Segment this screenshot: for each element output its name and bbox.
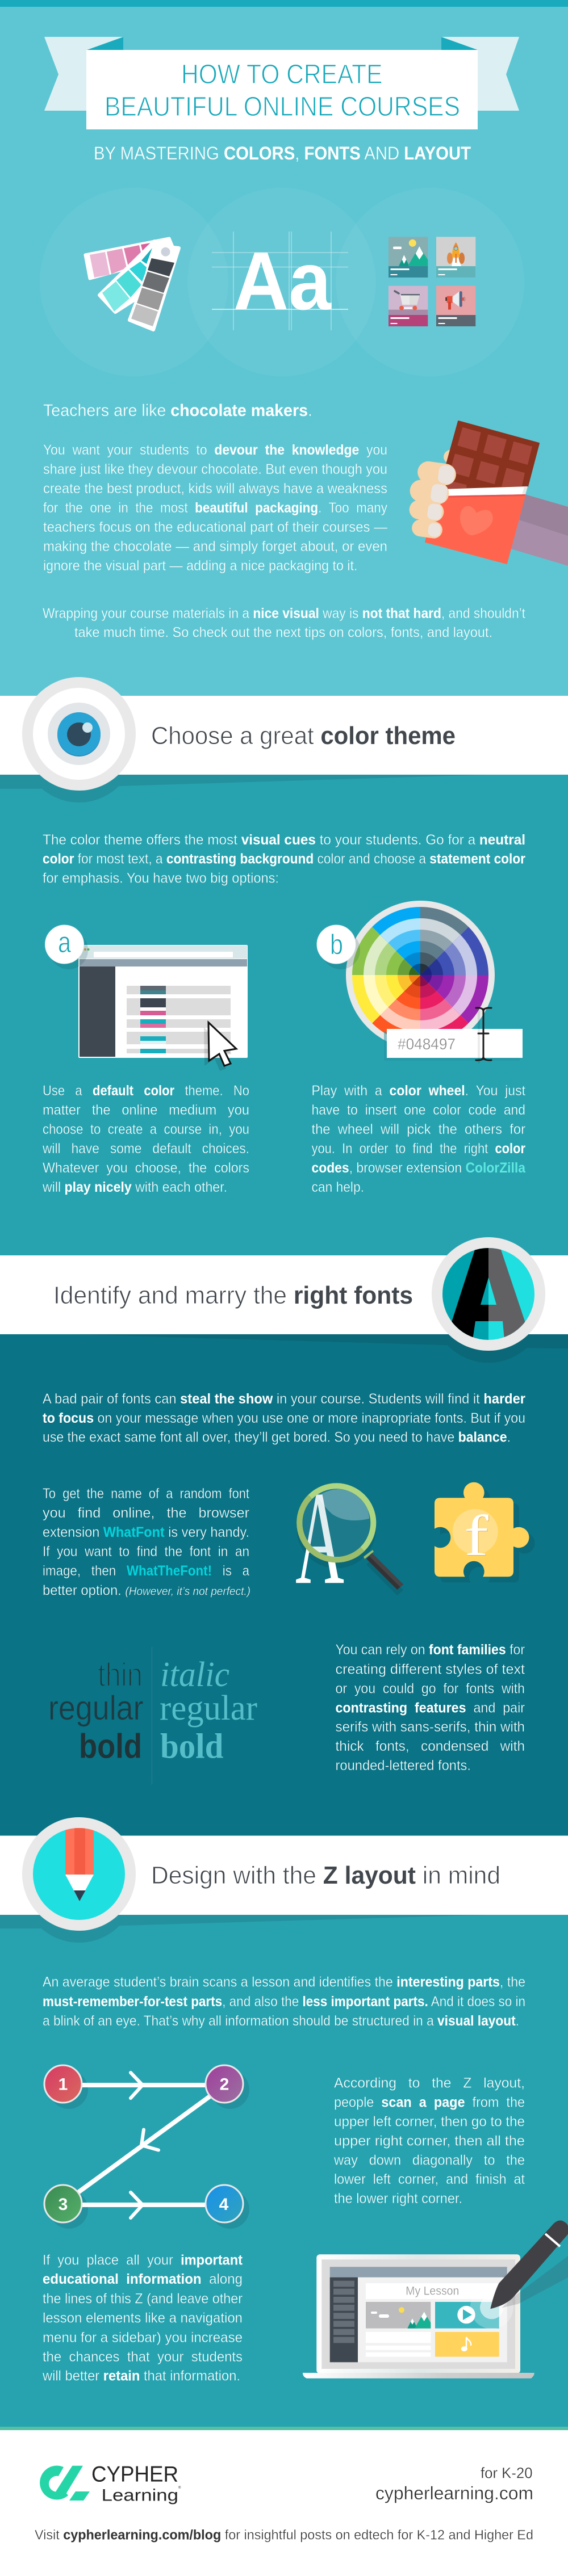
- lesson audio tile: [435, 2332, 499, 2357]
- touch ripple: [470, 2286, 513, 2329]
- option a text: matter the online medium you: [43, 1102, 249, 1118]
- font identify text: To get the name of a random font: [43, 1486, 249, 1502]
- retention text: educational information along: [43, 2271, 243, 2287]
- sample: serif: regular: [160, 1689, 257, 1728]
- Z layout explanation text: lower left corner, and finish at: [334, 2171, 525, 2187]
- card: rocket: [436, 237, 475, 278]
- intro paragraph: ignore the visual part — adding a nice packaging to it.: [43, 558, 358, 574]
- layout intro text: [43, 1974, 525, 2029]
- option a text: [42, 1083, 249, 1195]
- bubble: option a: [45, 925, 88, 969]
- sample: sans-serif: regular: [48, 1689, 143, 1727]
- illustration: laptop with lesson: [303, 2220, 568, 2379]
- diagram: Z layout: [44, 2065, 249, 2229]
- circle shadows: [49, 2070, 249, 2229]
- lesson text lines: [366, 2332, 431, 2357]
- layout intro text: An average student’s brain scans a lesson and identifies the interesting parts, the: [43, 1974, 525, 1990]
- intro paragraph: [43, 442, 387, 574]
- icon: puzzle piece with f: f: [464, 1504, 488, 1568]
- option a text: Use a default color theme. No: [43, 1083, 249, 1099]
- title: BEAUTIFUL ONLINE COURSES: [105, 92, 460, 122]
- sample: sans-serif: bold: [79, 1728, 142, 1765]
- option b text: codes, browser extension ColorZilla: [311, 1160, 526, 1176]
- font families text: [335, 1642, 525, 1774]
- background circles: [40, 188, 524, 376]
- bubble: option b: [317, 925, 360, 969]
- icon: mouse cursor: [204, 1023, 236, 1071]
- intro paragraph: share just like they devour chocolate. But even though you: [43, 461, 387, 477]
- icon: colour swatch fan: [85, 238, 179, 330]
- font families text: thick fonts, condensed with: [335, 1738, 525, 1754]
- option a text: Whatever you choose, the colors: [43, 1160, 249, 1176]
- Z layout explanation text: According to the Z layout,: [334, 2075, 525, 2091]
- color code input: [384, 1029, 523, 1061]
- chocolate: [440, 421, 539, 489]
- retention text: [42, 2252, 243, 2384]
- pen shadow: [502, 2256, 568, 2308]
- sample: serif: italic: [160, 1655, 229, 1694]
- option b illustration: color wheel: [338, 893, 523, 1062]
- intro paragraph: create the best product, kids will always have a weakness: [43, 481, 387, 497]
- layout intro text: must-remember-for-test parts, and also the less important parts. And it does so in: [43, 1994, 525, 2010]
- panel: fonts background: [0, 1334, 568, 1836]
- lesson video tile: [435, 2302, 499, 2329]
- icon: eye: [22, 677, 136, 791]
- node 3: [44, 2185, 82, 2222]
- fonts intro text: use the exact same font all over, they’ll get bored. So you need to have balance.: [43, 1429, 511, 1445]
- intro paragraph: for the one in the most beautiful packaging. Too many: [43, 500, 387, 516]
- heading: color theme: Choose a great color theme: [151, 722, 456, 750]
- logo wordmark: Learning: [102, 2486, 178, 2505]
- option b text: the wheel will pick the others for: [311, 1121, 525, 1137]
- icon: text cursor: [476, 1008, 491, 1062]
- arm: [511, 494, 568, 566]
- font identify text: you find online, the browser: [43, 1505, 249, 1521]
- heading: fonts: Identify and marry the right fonts: [53, 1281, 413, 1309]
- icon: pen: [490, 2220, 568, 2309]
- icon: pencil: [22, 1817, 136, 1931]
- option b text: can help.: [311, 1179, 364, 1195]
- intro paragraph: You want your students to devour the knowledge you: [43, 442, 387, 458]
- node 2: 2: [220, 2075, 229, 2094]
- lesson title: My Lesson: [406, 2284, 459, 2297]
- font families text: or you could go for fonts with: [335, 1681, 525, 1697]
- font families text: You can rely on font families for: [335, 1642, 525, 1658]
- option b text: you. In order to find the right color: [311, 1141, 525, 1157]
- option b text: [311, 1083, 526, 1195]
- footer stripe: [0, 2427, 568, 2430]
- logo wordmark: CYPHER: [91, 2462, 178, 2487]
- panel: footer: [0, 2430, 568, 2576]
- retention text: lesson elements like a navigation: [43, 2310, 243, 2326]
- logo wordmark: [91, 2462, 181, 2505]
- icon: letter A: [432, 1237, 545, 1351]
- font identify text: image, then WhatTheFont! is a: [43, 1563, 249, 1579]
- font families text: creating different styles of text: [335, 1662, 525, 1678]
- fonts intro text: to focus on your message when you use one or more inapropriate fonts. But if you: [43, 1410, 525, 1426]
- panel: intro background: [0, 0, 568, 696]
- panel: color theme background: [0, 775, 568, 1255]
- node 3: 3: [59, 2195, 68, 2214]
- option a illustration: browser window: [78, 945, 248, 1071]
- Z layout explanation text: way down diagonally to the: [333, 2152, 525, 2168]
- sample: sans-serif: [48, 1657, 143, 1765]
- subtitle: BY MASTERING COLORS, FONTS AND LAYOUT: [94, 143, 471, 163]
- fonts intro text: [43, 1391, 525, 1445]
- retention text: menu for a sidebar) you increase: [43, 2330, 243, 2346]
- bubble: option b: b: [330, 928, 343, 960]
- retention text: If you place all your important: [43, 2252, 243, 2268]
- panel: layout background: [0, 1915, 568, 2427]
- color theme intro text: [43, 832, 525, 886]
- option a text: will have some default choices.: [42, 1141, 249, 1157]
- font identify text: [43, 1486, 250, 1598]
- option b text: Play with a color wheel. You just: [311, 1083, 525, 1099]
- fingers: [408, 460, 457, 540]
- font identify text: extension WhatFont is very handy.: [43, 1524, 249, 1540]
- font identify text: If you want to find the font in an: [43, 1544, 249, 1560]
- node 2: [206, 2065, 243, 2103]
- Z layout explanation text: the lower right corner.: [334, 2191, 462, 2207]
- sample: sans-serif: thin: [98, 1657, 143, 1693]
- card: megaphone: [436, 286, 475, 326]
- font identify text: better option. (However, it’s not perfect.): [43, 1582, 250, 1598]
- icon: magnifying glass over letter A: A: [295, 1464, 344, 1612]
- lesson image tile: [366, 2302, 431, 2329]
- font family samples: [48, 1647, 257, 1784]
- lesson title: [366, 2283, 499, 2299]
- option b text: have to insert one color code and: [311, 1102, 525, 1118]
- laptop base: [303, 2373, 534, 2379]
- color code input: #048497: [398, 1035, 456, 1053]
- footer contact: for K-20: [481, 2464, 533, 2481]
- icon: magnifying glass over letter A: A: [295, 1464, 344, 1612]
- color theme intro text: The color theme offers the most visual cues to your students. Go for a neutral: [43, 832, 525, 848]
- logo mark: [40, 2466, 90, 2501]
- node 4: 4: [219, 2195, 229, 2214]
- icon: puzzle piece with f: f: [465, 1505, 489, 1569]
- node 4: [206, 2185, 243, 2222]
- title: HOW TO CREATE: [181, 60, 383, 90]
- node 1: 1: [59, 2075, 68, 2094]
- node 1: [44, 2065, 82, 2103]
- section band: color theme: [0, 677, 568, 802]
- icon: chocolate bar in hand: [408, 421, 568, 566]
- bubble: option a: a: [58, 926, 71, 959]
- wrapper: [425, 486, 528, 564]
- Z layout explanation text: people scan a page from the: [334, 2094, 525, 2110]
- Z layout explanation text: upper left corner, then go to the: [334, 2113, 525, 2129]
- Z layout explanation text: upper right corner, then all the: [334, 2133, 525, 2149]
- retention text: will better retain that information.: [42, 2368, 240, 2384]
- intro paragraph: making the chocolate — and simply forget about, or even: [43, 539, 387, 554]
- footer contact: cypherlearning.com: [375, 2483, 533, 2503]
- closing intro text: Wrapping your course materials in a nice visual way is not that hard, and shouldn’t: [43, 606, 525, 621]
- Z layout explanation text: [333, 2075, 525, 2207]
- option a text: choose to create a course in, you: [43, 1121, 249, 1137]
- icon: puzzle piece with f: [435, 1482, 535, 1582]
- icon: typography grid Aa: Aa: [233, 235, 332, 327]
- intro heading: Teachers are like chocolate makers.: [43, 401, 312, 420]
- layout intro text: a blink of an eye. That’s why all information should be structured in a visual layout.: [43, 2013, 519, 2029]
- closing intro text: take much time. So check out the next tips on colors, fonts, and layout.: [74, 624, 492, 640]
- top bar: [0, 0, 568, 7]
- font families text: contrasting features and pair: [335, 1700, 525, 1716]
- card: landscape: [389, 237, 428, 278]
- sample: serif: [160, 1655, 257, 1766]
- heading: layout: Design with the Z layout in mind: [151, 1861, 500, 1889]
- card: shopping cart: [389, 286, 428, 326]
- footer call to action: Visit cypherlearning.com/blog for insightful posts on edtech for K-12 and Higher Ed: [35, 2528, 533, 2543]
- closing intro text: [43, 606, 525, 640]
- color theme intro text: for emphasis. You have two big options:: [43, 871, 279, 886]
- retention text: the chances that your students: [43, 2349, 243, 2365]
- logo wordmark: ®: [178, 2486, 181, 2490]
- section band: fonts: [0, 1237, 568, 1363]
- retention text: the lines of this Z (and leave other: [43, 2291, 243, 2306]
- sidebar items: [333, 2281, 354, 2343]
- font families text: serifs with sans-serifs, thin with: [335, 1719, 525, 1735]
- fonts intro text: A bad pair of fonts can steal the show in your course. Students will find it harder: [43, 1391, 525, 1407]
- color theme intro text: color for most text, a contrasting background color and choose a statement color: [43, 851, 525, 867]
- icon: layout cards: [389, 237, 475, 326]
- title ribbon: [44, 37, 519, 129]
- font families text: rounded-lettered fonts.: [335, 1758, 471, 1774]
- section band: layout: [0, 1817, 568, 1943]
- arrows: [63, 2073, 224, 2218]
- footer contact: [375, 2464, 533, 2503]
- title: [105, 60, 460, 122]
- sample: serif: bold: [160, 1728, 224, 1766]
- intro paragraph: teachers focus on the educational part of their courses —: [43, 519, 387, 535]
- option a text: will play nicely with each other.: [42, 1179, 227, 1195]
- icon: magnifying glass over letter A: [296, 1483, 403, 1595]
